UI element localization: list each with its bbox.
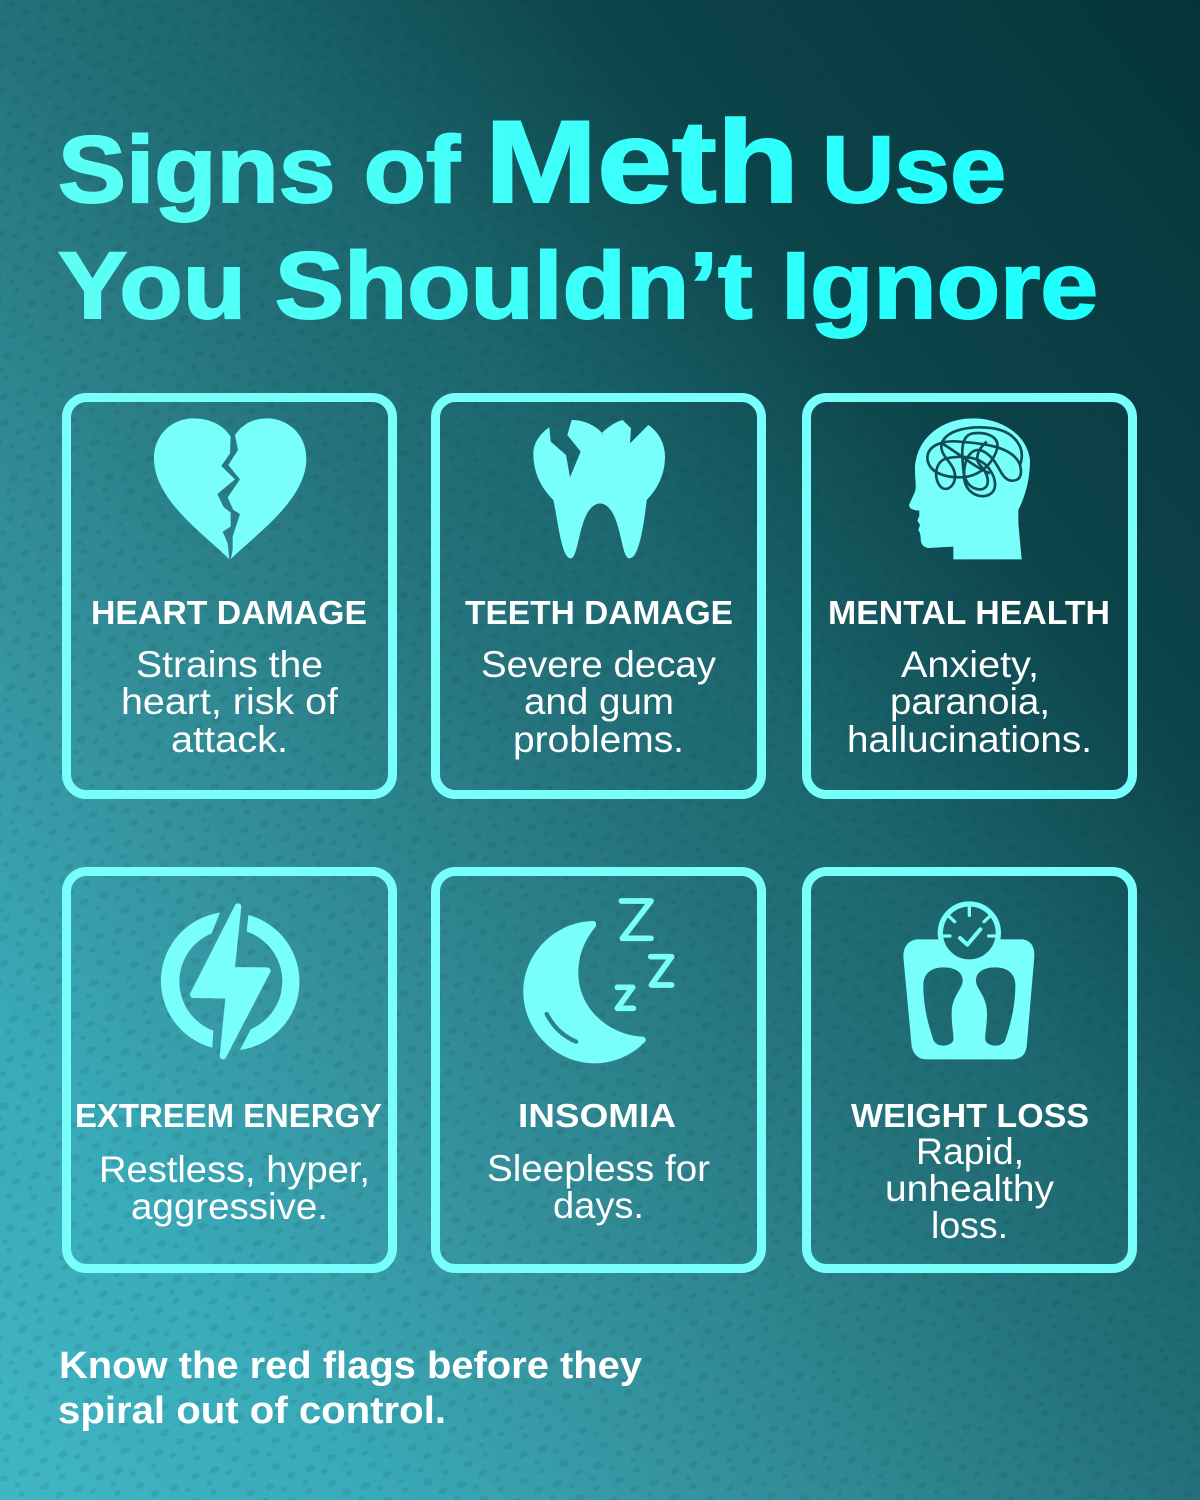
description: mental health: hallucinations. — [847, 719, 1092, 760]
icon: broken heart — [154, 418, 306, 559]
heading: mental health: MENTAL HEALTH — [828, 594, 1110, 631]
description: heart damage: heart, risk of — [121, 681, 339, 722]
panel: teeth damage — [436, 398, 762, 794]
icon: lightning bolt in ring — [161, 907, 300, 1056]
heading: teeth damage: TEETH DAMAGE — [465, 594, 733, 631]
panel: extreem energy — [66, 872, 392, 1268]
description: mental health: Anxiety, — [901, 644, 1039, 685]
heading: heart damage: HEART DAMAGE — [91, 594, 367, 631]
icon: head with tangled brain — [909, 418, 1030, 559]
footer tagline — [58, 1345, 642, 1432]
description: heart damage: Strains the — [136, 644, 323, 685]
description: teeth damage: problems. — [513, 719, 684, 760]
description: mental health — [847, 644, 1092, 760]
description: heart damage — [121, 644, 339, 760]
heading: extreem energy: EXTREEM ENERGY — [75, 1097, 382, 1134]
description: weight loss: loss. — [931, 1205, 1008, 1246]
title: You Shouldn’t Ignore — [58, 233, 1098, 339]
description: extreem energy — [99, 1149, 370, 1227]
title: Meth — [485, 96, 799, 227]
description: insomia: days. — [553, 1185, 644, 1226]
description: insomia — [487, 1148, 710, 1226]
icon: crescent moon with Z letters — [523, 901, 672, 1063]
description: mental health: paranoia, — [890, 681, 1050, 722]
footer tagline: Know the red flags before they — [59, 1345, 642, 1387]
description: extreem energy: aggressive. — [131, 1186, 328, 1227]
title: Use — [822, 117, 1006, 223]
icon: cracked tooth — [533, 420, 665, 558]
description: insomia: Sleepless for — [487, 1148, 710, 1189]
description: weight loss — [885, 1131, 1055, 1246]
heading: weight loss: WEIGHT LOSS — [851, 1097, 1089, 1134]
heading: insomia: INSOMIA — [518, 1097, 676, 1134]
description: weight loss: unhealthy — [885, 1168, 1055, 1209]
panel: insomia — [436, 872, 762, 1268]
icon: weighing scale — [903, 904, 1034, 1059]
description: teeth damage: and gum — [524, 681, 674, 722]
description: heart damage: attack. — [171, 719, 288, 760]
footer tagline: spiral out of control. — [58, 1390, 446, 1432]
title: Signs of — [58, 117, 460, 223]
description: extreem energy: Restless, hyper, — [99, 1149, 370, 1190]
panel: weight loss — [806, 872, 1132, 1268]
panel: heart damage — [66, 398, 392, 794]
description: teeth damage — [481, 644, 717, 760]
description: teeth damage: Severe decay — [481, 644, 717, 685]
panel: mental health — [806, 398, 1132, 794]
description: weight loss: Rapid, — [916, 1131, 1024, 1172]
title — [58, 96, 1098, 339]
